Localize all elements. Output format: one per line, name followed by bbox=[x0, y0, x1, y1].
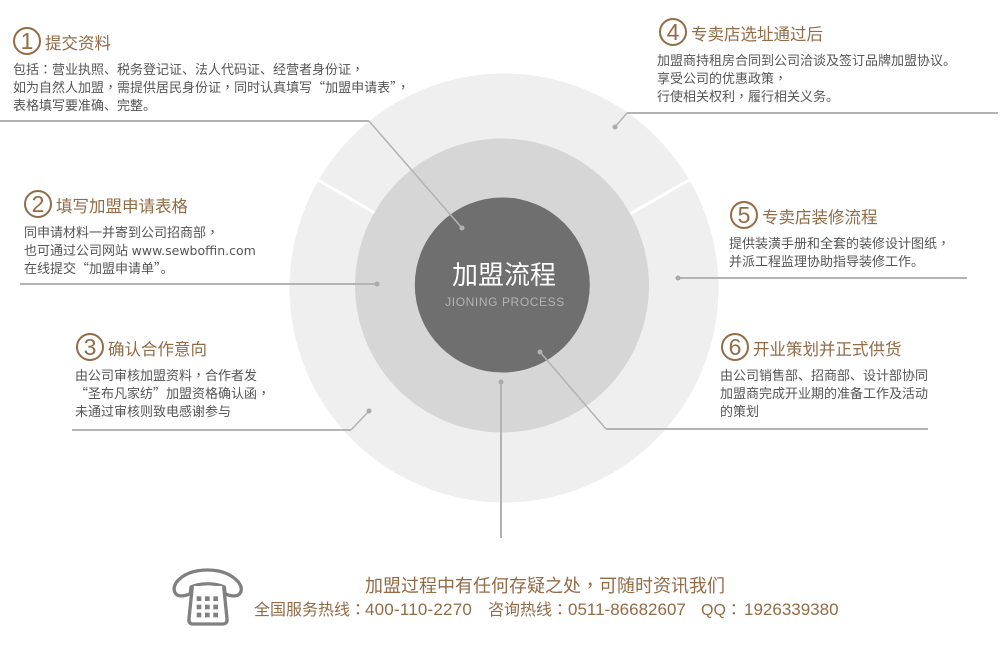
step 5 text bbox=[729, 233, 950, 269]
step 6 number bbox=[721, 333, 749, 361]
step 4 text bbox=[657, 53, 956, 105]
contact details: 0511-86682607 bbox=[568, 600, 686, 619]
step 1 text: 表格填写要准确、完整。 bbox=[13, 98, 156, 113]
contact heading: 加盟过程中有任何存疑之处，可随时资讯我们 bbox=[365, 572, 725, 598]
step 5 number bbox=[730, 201, 758, 229]
step 2 text: 在线提交“加盟申请单”。 bbox=[24, 258, 174, 277]
centre circle bbox=[415, 198, 590, 372]
step 6 text: 由公司销售部、招商部、设计部协同 bbox=[720, 368, 928, 383]
step 4 text: 行使相关权利，履行相关义务。 bbox=[657, 86, 839, 105]
centre subtitle: JIONING PROCESS bbox=[445, 295, 565, 309]
step 4 text: 加盟商持租房合同到公司洽谈及签订品牌加盟协议。 bbox=[657, 53, 956, 68]
contact details: 咨询热线： bbox=[488, 596, 568, 620]
step 2 text: 也可通过公司网站 www.sewboffin.com bbox=[24, 243, 256, 258]
ring dividers bbox=[318, 180, 689, 214]
step 5 number: 5 bbox=[738, 202, 750, 228]
step 5 bbox=[729, 201, 950, 269]
step 2 number bbox=[24, 190, 52, 218]
step 4 number: 4 bbox=[667, 19, 679, 45]
connector 3 bbox=[72, 408, 372, 430]
step 3 bbox=[75, 333, 270, 419]
step 3 text: 由公司审核加盟资料，合作者发 bbox=[75, 365, 257, 384]
centre title: 加盟流程 bbox=[452, 260, 556, 290]
icon: telephone bbox=[172, 568, 243, 626]
step 3 number: 3 bbox=[84, 334, 96, 360]
step 5 heading: 专卖店装修流程 bbox=[762, 209, 878, 227]
step 3 text bbox=[75, 365, 270, 419]
step 2 heading: 填写加盟申请表格 bbox=[56, 198, 188, 216]
connector 2 bbox=[20, 282, 380, 286]
contact details: 400-110-2270 bbox=[365, 600, 472, 619]
step 6 number: 6 bbox=[729, 334, 741, 360]
step 5 text: 提供装潢手册和全套的装修设计图纸， bbox=[729, 233, 950, 252]
middle ring bbox=[355, 138, 649, 432]
contact details: 全国服务热线： bbox=[254, 596, 366, 620]
step 4 text: 享受公司的优惠政策， bbox=[657, 68, 787, 87]
step 2 bbox=[24, 190, 256, 277]
step 1 number: 1 bbox=[21, 28, 33, 54]
outer ring bbox=[290, 74, 718, 502]
connector 6 bbox=[538, 350, 928, 429]
step 2 number: 2 bbox=[32, 191, 44, 217]
step 6 text bbox=[720, 368, 928, 419]
contact details: 1926339380 bbox=[744, 600, 839, 619]
step 6 heading: 开业策划并正式供货 bbox=[753, 341, 902, 359]
step 3 text: “圣布凡家纺”加盟资格确认函， bbox=[75, 383, 270, 402]
step 1 text bbox=[13, 59, 410, 113]
step 1 text: 如为自然人加盟，需提供居民身份证，同时认真填写“加盟申请表”， bbox=[13, 77, 410, 96]
step 6 text: 加盟商完成开业期的准备工作及活动 bbox=[720, 386, 928, 401]
step 3 heading: 确认合作意向 bbox=[108, 341, 207, 359]
connector 1 bbox=[0, 121, 464, 230]
step 1 text: 包括：营业执照、税务登记证、法人代码证、经营者身份证， bbox=[13, 59, 364, 78]
step 1 heading: 提交资料 bbox=[45, 35, 111, 53]
step 4 heading: 专卖店选址通过后 bbox=[691, 26, 823, 44]
contact details bbox=[254, 596, 839, 620]
step 6 bbox=[720, 333, 928, 419]
connector bottom bbox=[498, 380, 504, 538]
step 1 number bbox=[13, 27, 41, 55]
step 3 text: 未通过审核则致电感谢参与 bbox=[75, 404, 231, 419]
step 4 bbox=[657, 18, 956, 105]
step 3 number bbox=[76, 333, 104, 361]
step 5 text: 并派工程监理协助指导装修工作。 bbox=[729, 254, 924, 269]
step 4 number bbox=[659, 18, 687, 46]
connector 4 bbox=[612, 113, 998, 130]
step 6 text: 的策划 bbox=[720, 404, 759, 419]
contact details: QQ： bbox=[701, 596, 742, 620]
step 2 text: 同申请材料一并寄到公司招商部， bbox=[24, 222, 219, 241]
step 1 bbox=[13, 27, 410, 113]
connector 5 bbox=[676, 276, 967, 280]
step 2 text bbox=[24, 222, 256, 277]
